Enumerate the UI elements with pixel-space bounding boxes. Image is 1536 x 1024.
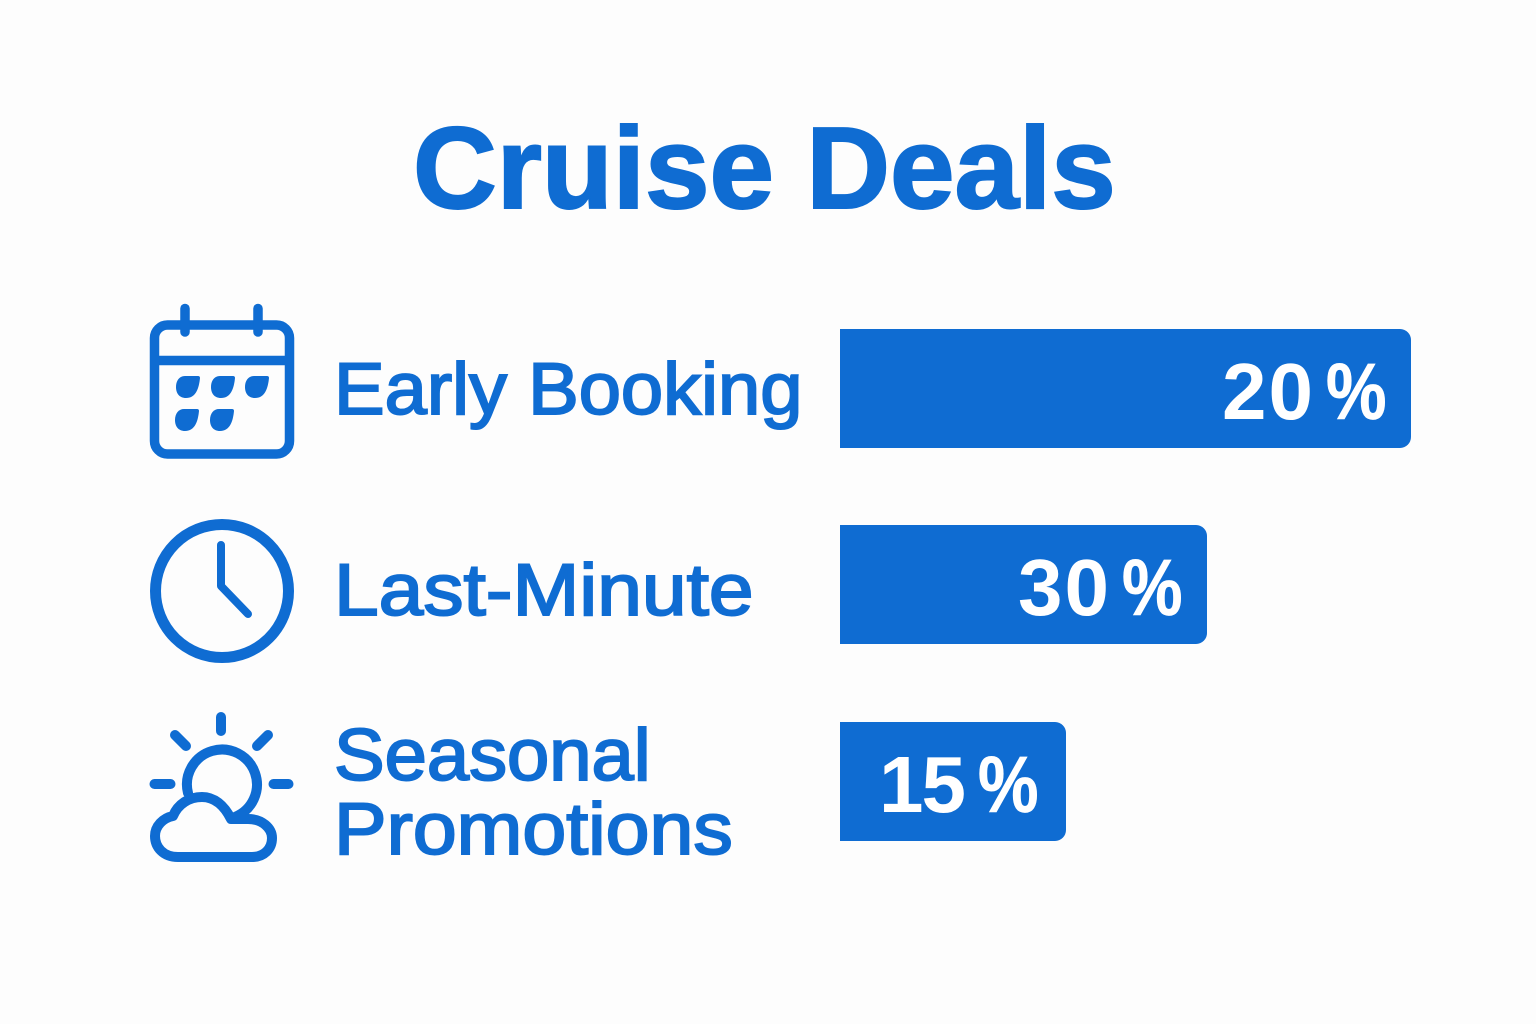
icon: calendar (150, 304, 294, 459)
label: Last-Minute: Last-Minute (334, 550, 754, 631)
icon: clock (150, 519, 294, 663)
bar: Last-Minute 30% (840, 525, 1207, 644)
value: 30%: 30 (1018, 543, 1111, 632)
value: 20%: % (1326, 347, 1386, 436)
value: 30%: % (1122, 543, 1182, 632)
bar: Early Booking 20% (840, 329, 1411, 448)
value: 15% (879, 740, 1038, 829)
label: Seasonal Promotions: Promotions (334, 789, 733, 870)
icon: sun and cloud (150, 712, 294, 862)
value: 30% (1018, 543, 1182, 632)
value: 20%: 20 (1222, 347, 1315, 436)
value: 15%: % (978, 740, 1038, 829)
value: 20% (1222, 347, 1386, 436)
title: Cruise Deals (413, 103, 1116, 233)
label: Seasonal Promotions (334, 715, 733, 870)
value: 15%: 15 (879, 740, 964, 829)
label: Early Booking: Early Booking (334, 349, 802, 430)
label: Seasonal Promotions: Seasonal (334, 715, 651, 796)
bar: Seasonal Promotions 15% (840, 722, 1066, 841)
